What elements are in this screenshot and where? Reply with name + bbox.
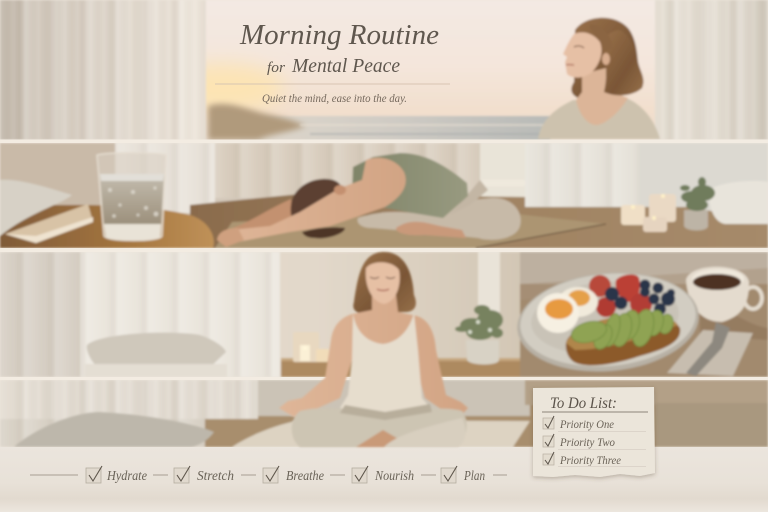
check item: breathe: Breathe — [286, 468, 324, 483]
avocado toast — [566, 307, 680, 365]
shelf — [280, 360, 522, 377]
check item: plan — [441, 466, 485, 483]
book — [4, 204, 93, 237]
title: Morning Routine — [239, 20, 439, 51]
floor pillow — [14, 412, 214, 447]
check item: nourish: Nourish — [374, 468, 414, 483]
breakfast table — [519, 282, 768, 377]
candles on shelf — [293, 332, 330, 362]
panel: sunrise window scene — [0, 0, 768, 140]
check item: hydrate: Hydrate — [106, 468, 147, 483]
round wooden table — [0, 205, 214, 248]
person in child's pose — [217, 153, 521, 247]
footer band — [0, 447, 768, 512]
plate — [516, 272, 700, 373]
napkin and fork — [667, 322, 753, 376]
face — [366, 262, 400, 304]
panel: stretching scene — [0, 143, 768, 248]
pillow — [0, 180, 72, 236]
subtitle: Quiet the mind, ease into the day. — [262, 93, 407, 105]
woman in profile — [538, 18, 660, 139]
hair — [353, 252, 416, 314]
to-do note — [533, 387, 655, 477]
fluffy cushion — [710, 181, 768, 224]
note item: priority three: Priority Three — [559, 455, 621, 467]
candles — [621, 194, 676, 232]
title: Mental Peace — [291, 55, 400, 77]
meditating woman — [279, 252, 468, 447]
bed pillow — [86, 332, 226, 365]
check item: plan: Plan — [463, 468, 485, 483]
potted plant — [680, 177, 715, 230]
note item: priority one: Priority One — [559, 419, 614, 431]
check item: stretch — [174, 466, 234, 483]
panel: floor and bedding scene — [0, 380, 768, 447]
note heading: To Do List: — [550, 395, 617, 412]
panel dividers — [0, 140, 768, 380]
glass of water — [97, 153, 166, 241]
check item: breathe — [263, 466, 324, 483]
check item: hydrate — [86, 466, 147, 483]
note item: priority two: Priority Two — [559, 437, 615, 449]
check item: stretch: Stretch — [197, 468, 234, 483]
berries — [589, 274, 675, 317]
boiled eggs — [537, 287, 598, 333]
trousers — [292, 408, 467, 447]
title: for — [267, 60, 285, 76]
tank top — [340, 313, 432, 415]
coffee cup — [686, 267, 762, 322]
potted plant on shelf — [455, 305, 503, 364]
check item: nourish — [352, 466, 414, 483]
title — [240, 25, 438, 75]
panel: meditation room and breakfast — [0, 252, 768, 379]
floor cushion — [232, 420, 530, 447]
checklist strip — [30, 466, 507, 483]
skin: neck, shoulders and arms — [279, 295, 468, 417]
